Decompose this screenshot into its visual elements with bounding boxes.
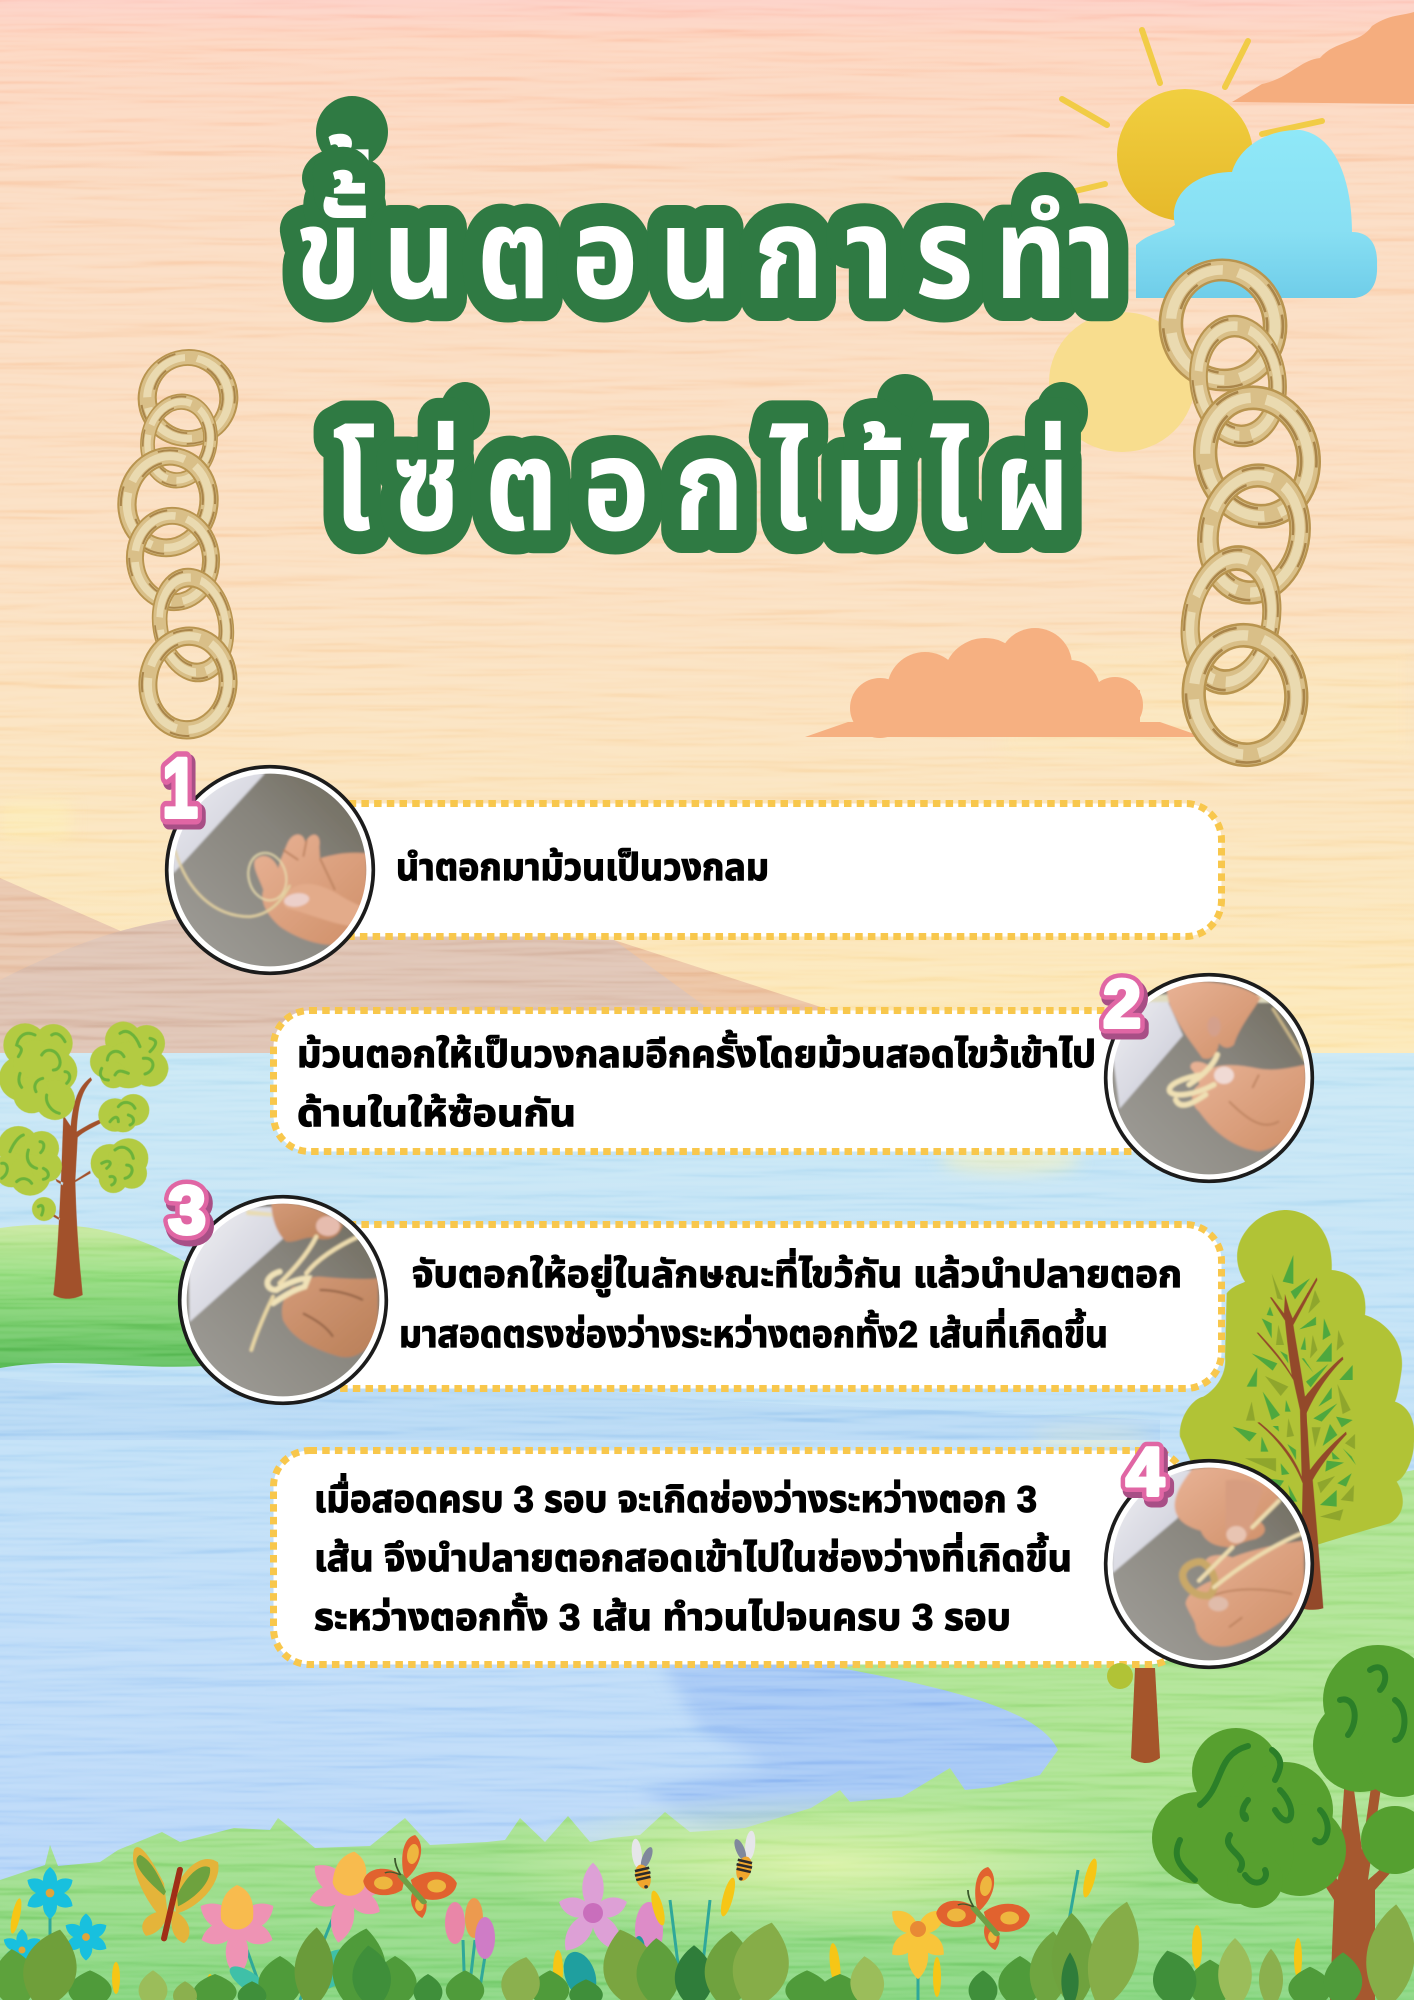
stems: [50, 1870, 1078, 2000]
title raised outline bumps: [302, 96, 1088, 442]
trunk and branches: [1257, 1277, 1347, 1610]
raised tone mark: ้: [328, 135, 369, 162]
bottom leaves: [0, 1896, 1414, 2000]
panel step 3: [300, 1224, 1222, 1388]
title: [295, 96, 1116, 558]
green tree right bottom: [1152, 1645, 1414, 2000]
panel box: [300, 804, 1222, 936]
step number 4: 4: [1126, 1434, 1164, 1510]
panel step 2: [274, 1010, 1174, 1152]
pale paint patches in sky: [0, 640, 1414, 840]
light meadow patch: [490, 1790, 1170, 1940]
left island: [0, 1225, 215, 1368]
orange cloud top right: [1232, 12, 1414, 104]
teal leaves: [225, 1941, 602, 2000]
crown large: [1152, 1728, 1346, 1908]
step number 3: 3: [168, 1172, 206, 1248]
trunk and branches: [53, 1077, 102, 1299]
back row filler leaves: [68, 1956, 1332, 2000]
step number 2: 2: [1103, 966, 1141, 1042]
darker water near far shore: [640, 1660, 1090, 1850]
step 4 text: เมื่อสอดครบ 3 รอบ จะเกิดช่องว่างระหว่างตอก 3: [314, 1473, 1037, 1520]
step number 4: 4: [1126, 1434, 1164, 1510]
trunk: [1315, 1775, 1400, 2000]
step 3 text line 2: มาสอดตรงช่องว่างระหว่างตอกทั้ง2 เส้นที่เกิดขึ้น: [399, 1308, 1108, 1355]
title line 1: ขั้นตอนการทำ: [295, 170, 1116, 326]
foliage clusters: [0, 1022, 168, 1221]
step 1 text: นำตอกมาม้วนเป็นวงกลม: [396, 847, 769, 888]
left tree: [0, 1022, 168, 1299]
bee right: [732, 1830, 757, 1882]
yellow spikes: [8, 1857, 1302, 2000]
tulips: [445, 1898, 663, 1964]
orange butterfly 2: [936, 1867, 1030, 1950]
yellow butterfly: [133, 1847, 219, 1943]
step number 2: 2: [1106, 971, 1144, 1047]
foliage marks: [2, 1031, 156, 1215]
photo step 4: finishing the knot: [1106, 1461, 1312, 1667]
step 3 text: จับตอกให้อยู่ในลักษณะที่ไขว้กัน แล้วนำปลายตอก: [412, 1248, 1182, 1297]
panel box: [274, 1010, 1174, 1152]
step 2 text: ม้วนตอกให้เป็นวงกลมอีกครั้งโดยม้วนสอดไขว้เข้าไป: [297, 1029, 1096, 1075]
step 2 text line 2: ด้านในให้ซ้อนกัน: [297, 1093, 576, 1134]
crown marks: [1177, 1667, 1404, 1883]
step number 3: 3: [171, 1177, 209, 1253]
photo step 3: threading strip: [180, 1197, 386, 1403]
small tree trunk below panel 4: [1107, 1663, 1160, 1763]
panel step 1: [300, 804, 1222, 936]
panel box: [300, 1224, 1222, 1388]
photo step 2: fingers crossing strips: [1106, 975, 1312, 1181]
pale yellow sun: [1049, 312, 1195, 452]
step 4 text line 2: เส้น จึงนำปลายตอกสอดเข้าไปในช่องว่างที่เกิดขึ้น: [314, 1532, 1072, 1579]
step number 2: 2: [1103, 966, 1141, 1042]
step 4 text line 3: ระหว่างตอกทั้ง 3 เส้น ทำวนไปจนครบ 3 รอบ: [314, 1592, 1011, 1638]
orange butterfly 1: [363, 1835, 457, 1918]
sun: [1117, 89, 1253, 221]
step number 4: 4: [1129, 1439, 1167, 1515]
pale reflections in water: [940, 1146, 1150, 1445]
crown top right: [1313, 1645, 1414, 1874]
step number 1: 1: [165, 745, 201, 839]
photo step 1: hand forming a ring: [167, 767, 373, 973]
river: [0, 1053, 1414, 1893]
step number 1: 1: [162, 741, 198, 835]
step number 1: 1: [162, 741, 198, 835]
yellow flower: [886, 1905, 950, 1979]
bamboo chain left: [111, 342, 245, 741]
bamboo chain right: [1153, 253, 1331, 768]
pink flowers: [195, 1844, 396, 1977]
right shore and meadow: [0, 1470, 1414, 2000]
crown: [1180, 1210, 1414, 1545]
orange cloud middle: [805, 628, 1203, 738]
sun rays: [1062, 30, 1322, 192]
panel box: [274, 1450, 1186, 1664]
mountains: [0, 878, 880, 1060]
bottom flowers: [1, 1844, 1302, 2000]
right big tree: [1180, 1210, 1414, 1610]
purple flower: [556, 1863, 630, 1957]
leaves triangles: [1233, 1255, 1356, 1507]
blue flowers: [1, 1867, 110, 1971]
bee left: [630, 1838, 655, 1890]
panel step 4: [274, 1450, 1186, 1664]
blue cloud: [1136, 130, 1377, 298]
title line 2: โซ่ตอกไม้ไผ่: [332, 414, 1070, 558]
step number 3: 3: [168, 1172, 206, 1248]
